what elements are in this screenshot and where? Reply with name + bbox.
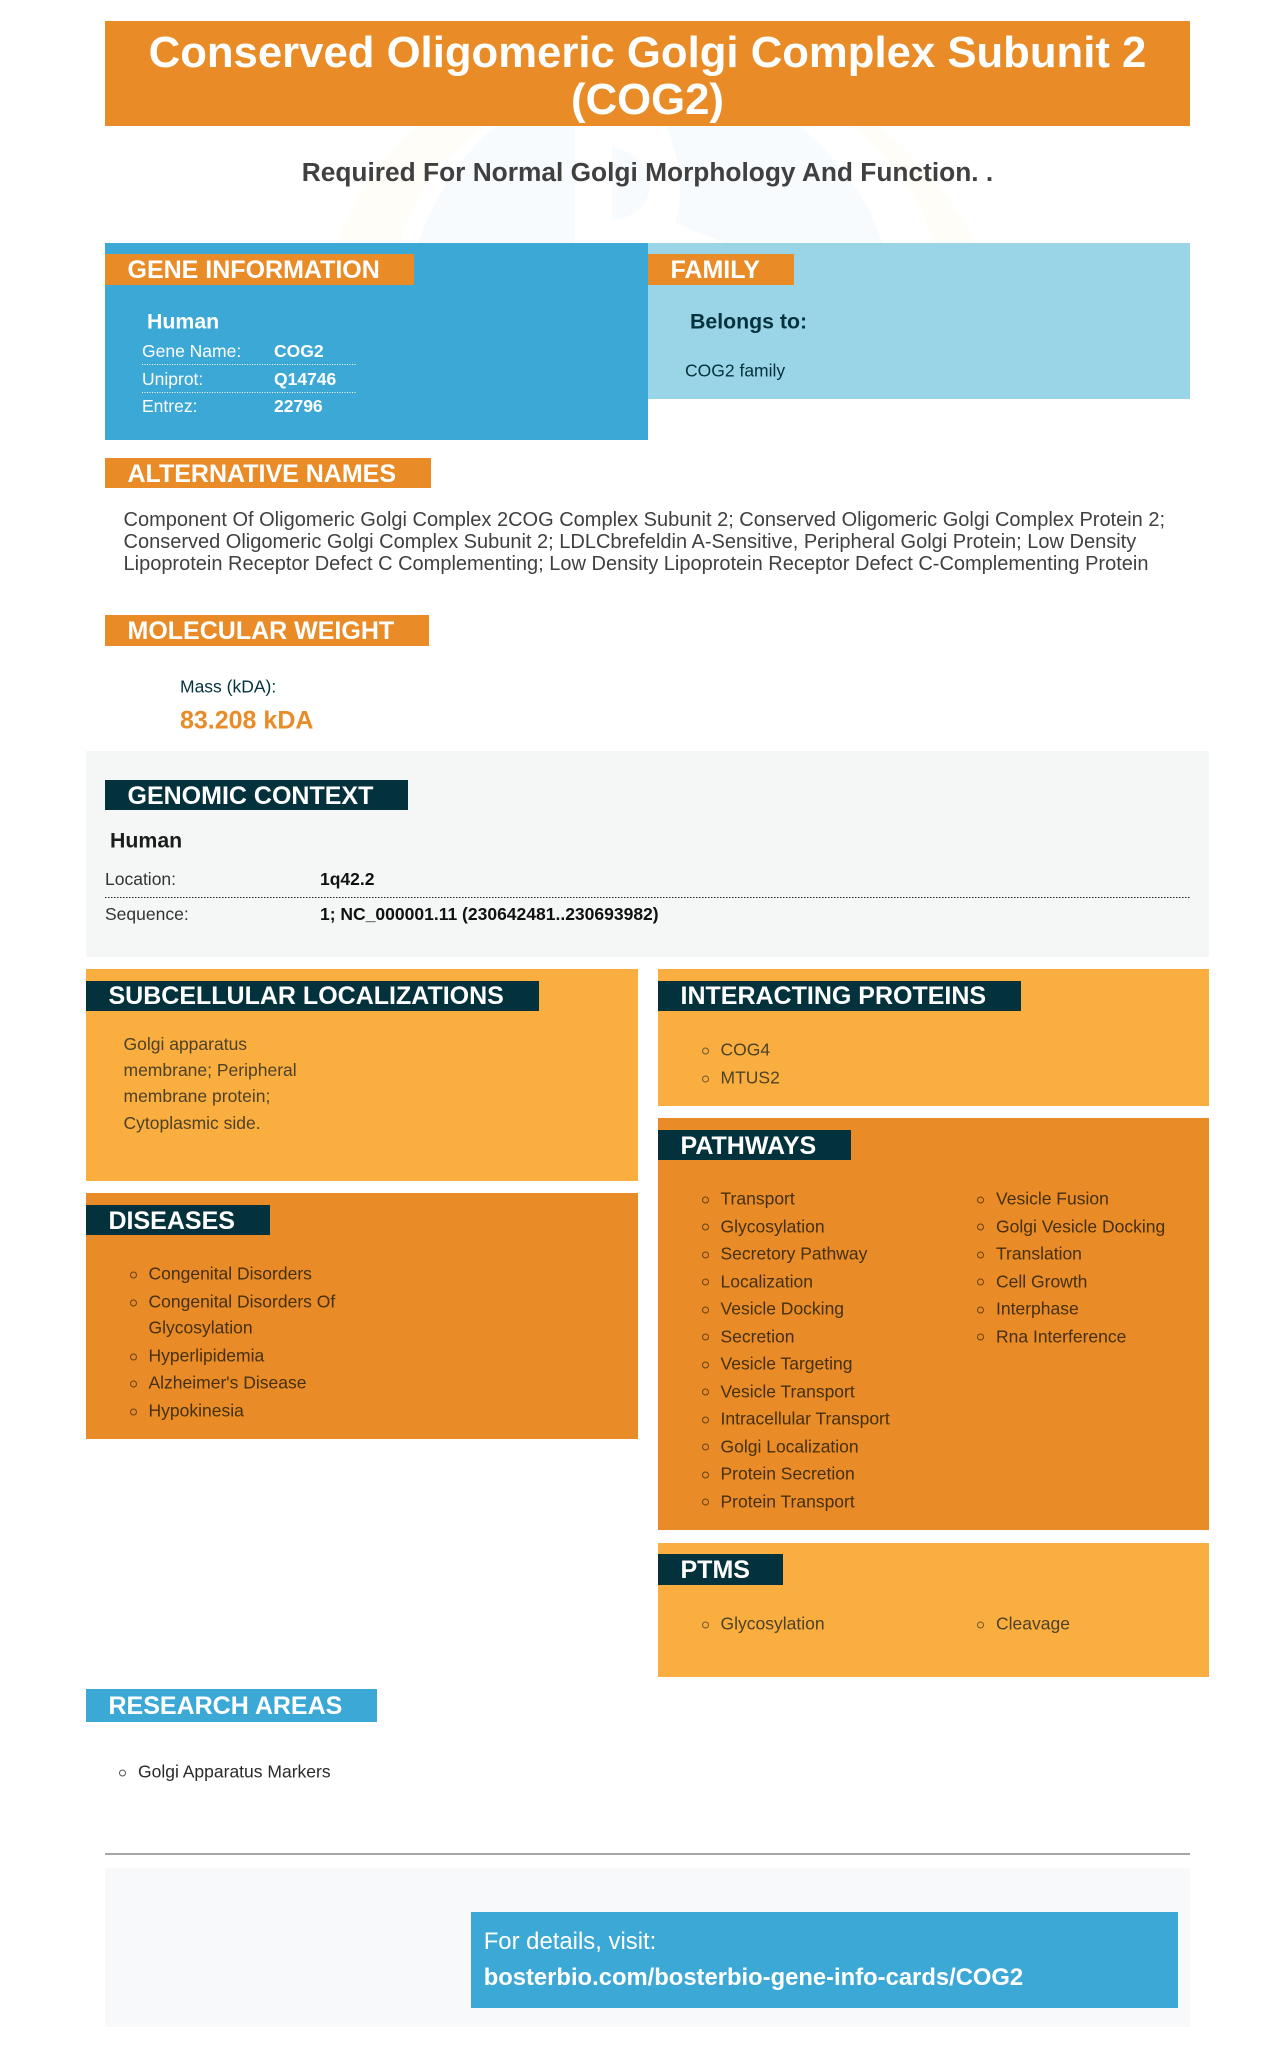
heading: interacting proteins: INTERACTING PROTEINS [680,982,986,1010]
panel: footer [105,1868,1190,2027]
location row: Location: [105,869,176,889]
localization text: Cytoplasmic side. [124,1113,261,1133]
heading: family: FAMILY [670,256,760,284]
heading: ptms: PTMS [680,1556,750,1584]
visit label: For details, visit: [484,1928,656,1955]
sequence row [105,904,659,924]
species: human: Human [147,310,219,334]
pathway list column 1: Transport [720,1188,795,1208]
pathway list column 2: Rna Interference [996,1326,1126,1346]
callout: details link [471,1912,1178,2008]
entrez row: Entrez: [142,396,197,416]
title banner: (COG2) [571,75,724,124]
alternative names text [124,509,1165,575]
heading: pathways: PATHWAYS [680,1132,816,1160]
entrez row [142,396,323,416]
pathway list column 1: Vesicle Targeting [720,1354,852,1374]
heading: alternative names: ALTERNATIVE NAMES [128,460,396,488]
heading: ptms [658,1554,783,1585]
disease list: Glycosylation [148,1318,253,1338]
visit url: bosterbio.com/bosterbio-gene-info-cards/COG2 [484,1964,1023,1991]
panel: pathways [658,1118,1209,1530]
ptm item: cleavage: Cleavage [996,1614,1070,1634]
footer divider [105,1853,1190,1855]
localization text: membrane protein; [124,1086,270,1106]
heading: genomic context: GENOMIC CONTEXT [128,782,373,810]
pathway list column 1: Vesicle Docking [720,1298,844,1318]
research area item: Golgi Apparatus Markers [138,1762,331,1782]
sequence row: 1; NC_000001.11 (230642481..230693982) [320,904,659,924]
uniprot row: Uniprot: [142,369,203,389]
pathway list column 2 [977,1188,1165,1346]
heading: molecular weight: MOLECULAR WEIGHT [128,617,394,645]
heading: gene information: GENE INFORMATION [128,256,380,284]
ptm item: glycosylation: Glycosylation [720,1614,825,1634]
pathway list column 2: Translation [996,1244,1082,1264]
pathway list column 1: Intracellular Transport [720,1408,890,1428]
disease list: Alzheimer's Disease [148,1372,306,1392]
protein list [702,1040,780,1088]
location row [105,865,1190,898]
pathway list column 1: Vesicle Transport [720,1381,855,1401]
pathway list column 1 [702,1188,890,1511]
alternative names text: Lipoprotein Receptor Defect C Complementing; Low Density Lipoprotein Receptor Defect C-Complementing Protein [124,553,1148,575]
disease list: Hyperlipidemia [148,1346,264,1366]
pathway list column 2: Golgi Vesicle Docking [996,1216,1165,1236]
alternative names text: Conserved Oligomeric Golgi Complex Subunit 2; LDLCbrefeldin A-Sensitive, Peripheral Golgi Protein; Low Density [124,531,1136,553]
pathway list column 1: Secretion [720,1326,794,1346]
mass value: 83.208 kDA [180,706,313,734]
heading: diseases [86,1205,270,1235]
location row: 1q42.2 [320,869,374,889]
belongs to label: Belongs to: [690,310,807,334]
localization text: Golgi apparatus [124,1034,247,1054]
panel: subcellular localizations [86,969,638,1181]
subtitle: Required For Normal Golgi Morphology And Function. . [302,157,993,187]
pathway list column 1: Secretory Pathway [720,1244,867,1264]
pathway list column 1: Glycosylation [720,1216,825,1236]
heading: diseases: DISEASES [108,1206,235,1234]
panel: family [648,243,1190,398]
disease list [130,1264,336,1420]
pathway list column 1: Protein Secretion [720,1464,855,1484]
title banner [105,21,1190,126]
panel: genomic context [86,751,1209,957]
family value: COG2 family [685,360,785,380]
heading: subcellular localizations: SUBCELLULAR LOCALIZATIONS [108,982,504,1010]
panel: gene information [105,243,648,440]
pathway list column 1: Protein Transport [720,1491,855,1511]
gene name row [142,339,357,365]
pathway list column 1: Golgi Localization [720,1436,859,1456]
species: human: Human [110,828,182,852]
pathway list column 2: Interphase [996,1298,1079,1318]
heading: family [648,254,794,285]
panel: ptms [658,1543,1209,1677]
uniprot row [142,367,357,393]
title banner: Conserved Oligomeric Golgi Complex Subunit 2 [149,28,1146,77]
localization text: membrane; Peripheral [124,1060,297,1080]
protein list: MTUS2 [720,1068,780,1088]
watermark logo [330,126,980,243]
disease list: Congenital Disorders [148,1264,312,1284]
panel: interacting proteins [658,969,1209,1106]
heading: research areas [86,1689,377,1722]
entrez row: 22796 [274,396,323,416]
panel: diseases [86,1193,638,1439]
heading: pathways [658,1130,851,1160]
uniprot row: Q14746 [274,369,336,389]
disease list: Hypokinesia [148,1400,244,1420]
alternative names text: Component Of Oligomeric Golgi Complex 2COG Complex Subunit 2; Conserved Oligomeric Golgi Complex Protein 2; [124,509,1165,531]
gene name row: Gene Name: [142,341,241,361]
localization text [124,1034,297,1133]
pathway list column 2: Cell Growth [996,1271,1087,1291]
mass label: Mass (kDA): [180,676,276,696]
protein list: COG4 [720,1040,770,1060]
pathway list column 2: Vesicle Fusion [996,1188,1109,1208]
gene name row: COG2 [274,341,324,361]
disease list: Congenital Disorders Of [148,1292,335,1312]
pathway list column 1: Localization [720,1271,813,1291]
sequence row: Sequence: [105,904,189,924]
heading: research areas: RESEARCH AREAS [108,1692,342,1720]
